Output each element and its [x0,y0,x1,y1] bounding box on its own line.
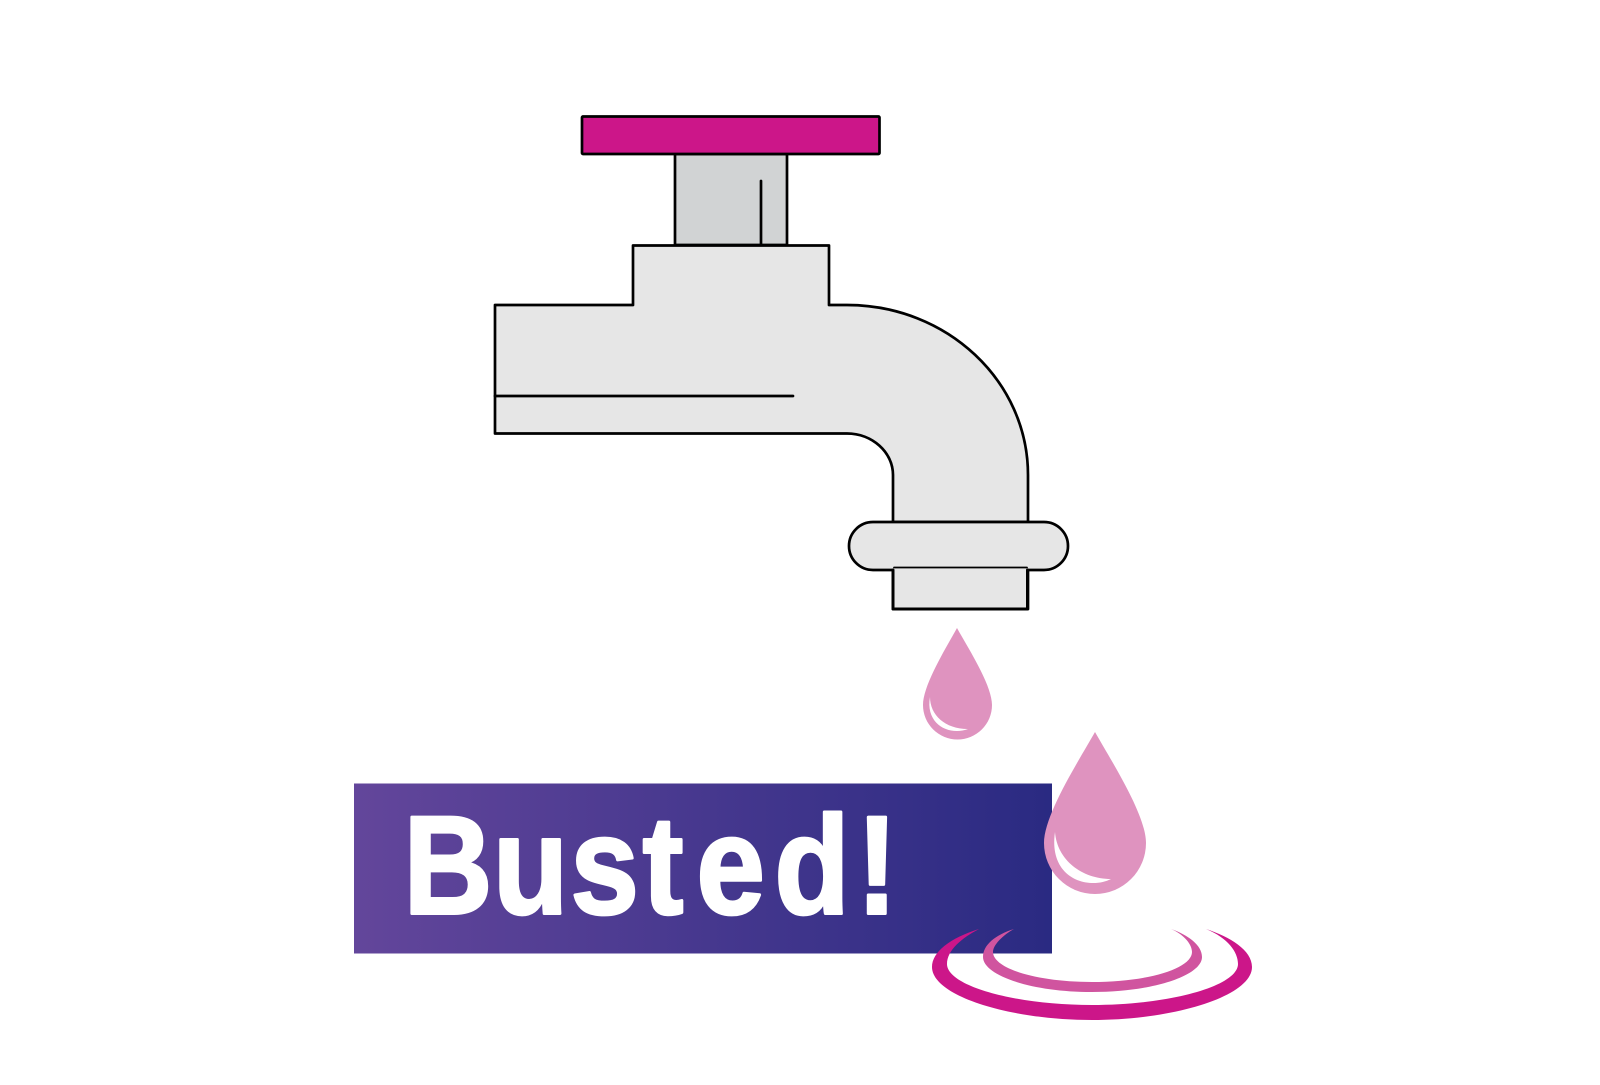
icon: water ripples [932,929,1252,1020]
icon: dripping tap [495,116,1068,609]
icon: large water drop [1044,732,1146,894]
tap nozzle [893,566,1028,609]
inner ripple [983,929,1202,992]
tap handle [582,116,880,154]
banner title: Busted! [403,787,898,943]
tap collar [849,522,1068,609]
tap stem [675,154,787,245]
outer ripple [932,929,1252,1020]
banner [354,784,1052,954]
icon: small water drop [923,628,992,740]
tap body [495,246,1028,522]
